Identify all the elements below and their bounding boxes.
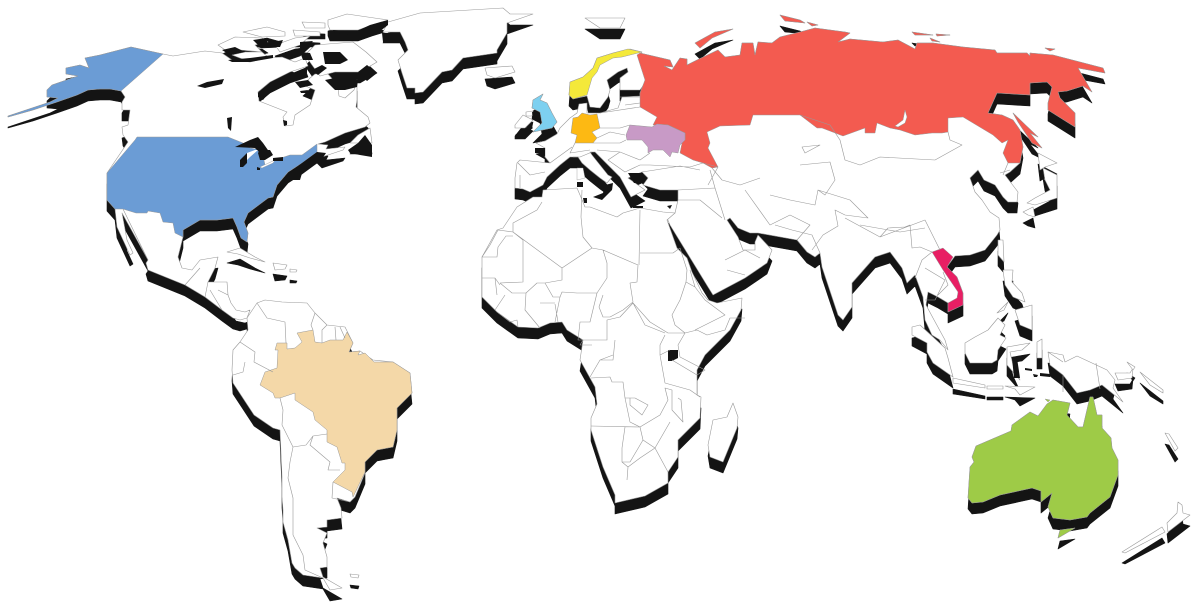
country: Ukraine (purple) — [626, 124, 685, 157]
country: Norway (yellow) — [569, 49, 642, 99]
black sea channels, lakes and arctic straits — [197, 20, 1070, 418]
country borders — [123, 97, 1100, 578]
country: Russia (red) — [637, 15, 1105, 168]
country: United Kingdom (light blue) — [532, 94, 557, 132]
country: Australia (green) — [968, 397, 1118, 538]
country: Brazil (tan) — [260, 330, 412, 497]
country: USA and Alaska (blue) — [8, 47, 317, 242]
country: Germany (orange) — [571, 113, 600, 143]
country: Vietnam (magenta) — [932, 248, 963, 312]
